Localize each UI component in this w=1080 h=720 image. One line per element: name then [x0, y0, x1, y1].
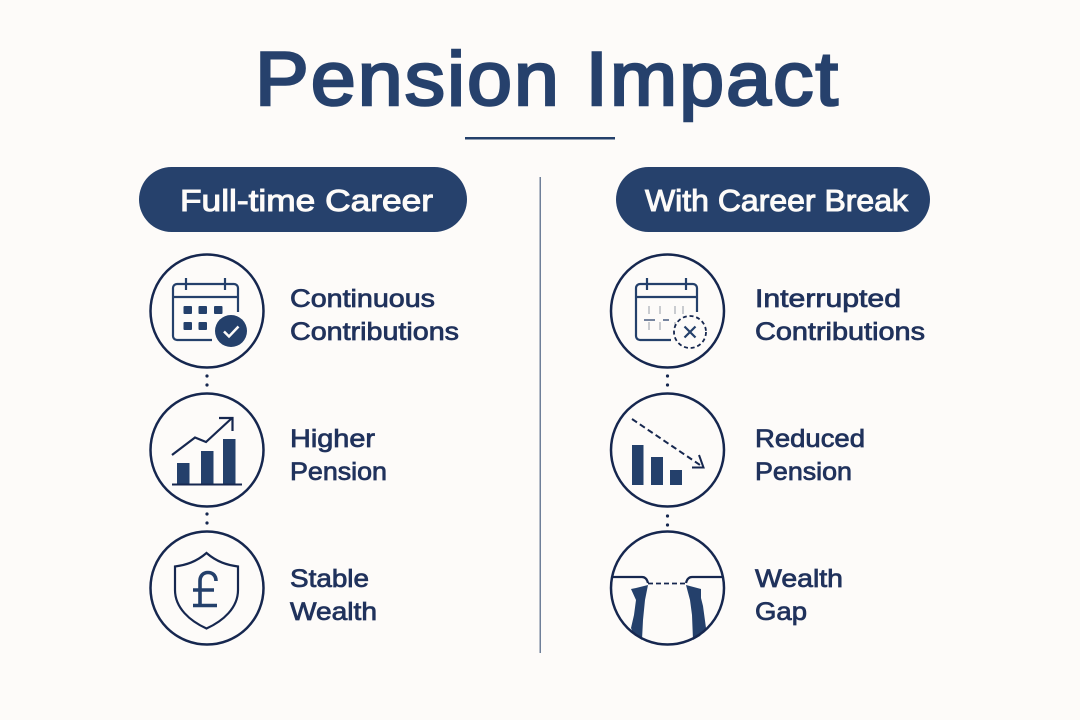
column divider [540, 177, 541, 653]
connector dots [666, 374, 669, 527]
label: interrupted contributions: Interrupted [755, 285, 901, 313]
label: higher pension [290, 425, 387, 486]
label: stable wealth: Stable [290, 565, 369, 593]
icon: shield with pound [150, 532, 264, 644]
label: reduced pension: Reduced [755, 425, 865, 453]
icon: rising bar chart [150, 394, 264, 506]
icon: calendar with check [150, 254, 264, 368]
label: continuous contributions: Continuous [290, 285, 435, 313]
heading pill: with career break [616, 167, 930, 232]
label: wealth gap: Wealth [755, 565, 843, 593]
label: wealth gap: Gap [755, 598, 807, 626]
icon: wealth gap [611, 532, 724, 644]
heading pill: full-time career [139, 167, 467, 232]
icon: calendar with cross [611, 254, 724, 368]
label: interrupted contributions [755, 285, 925, 346]
label: interrupted contributions: Contributions [755, 318, 925, 346]
label: wealth gap [755, 565, 843, 626]
panel: full-time career [139, 167, 467, 644]
title: Pension Impact [255, 37, 840, 122]
label: continuous contributions [290, 285, 459, 346]
label: reduced pension [755, 425, 865, 486]
label: stable wealth [290, 565, 377, 626]
label: higher pension: Pension [290, 458, 387, 486]
label: reduced pension: Pension [755, 458, 852, 486]
label: continuous contributions: Contributions [290, 318, 459, 346]
heading pill: full-time career: Full-time Career [180, 184, 433, 218]
label: higher pension: Higher [290, 425, 375, 453]
heading pill: with career break: With Career Break [645, 184, 909, 218]
panel: with career break [611, 167, 930, 644]
icon: falling bar chart [611, 394, 724, 506]
title underline [465, 137, 615, 140]
connector dots [205, 374, 209, 525]
label: stable wealth: Wealth [290, 598, 377, 626]
